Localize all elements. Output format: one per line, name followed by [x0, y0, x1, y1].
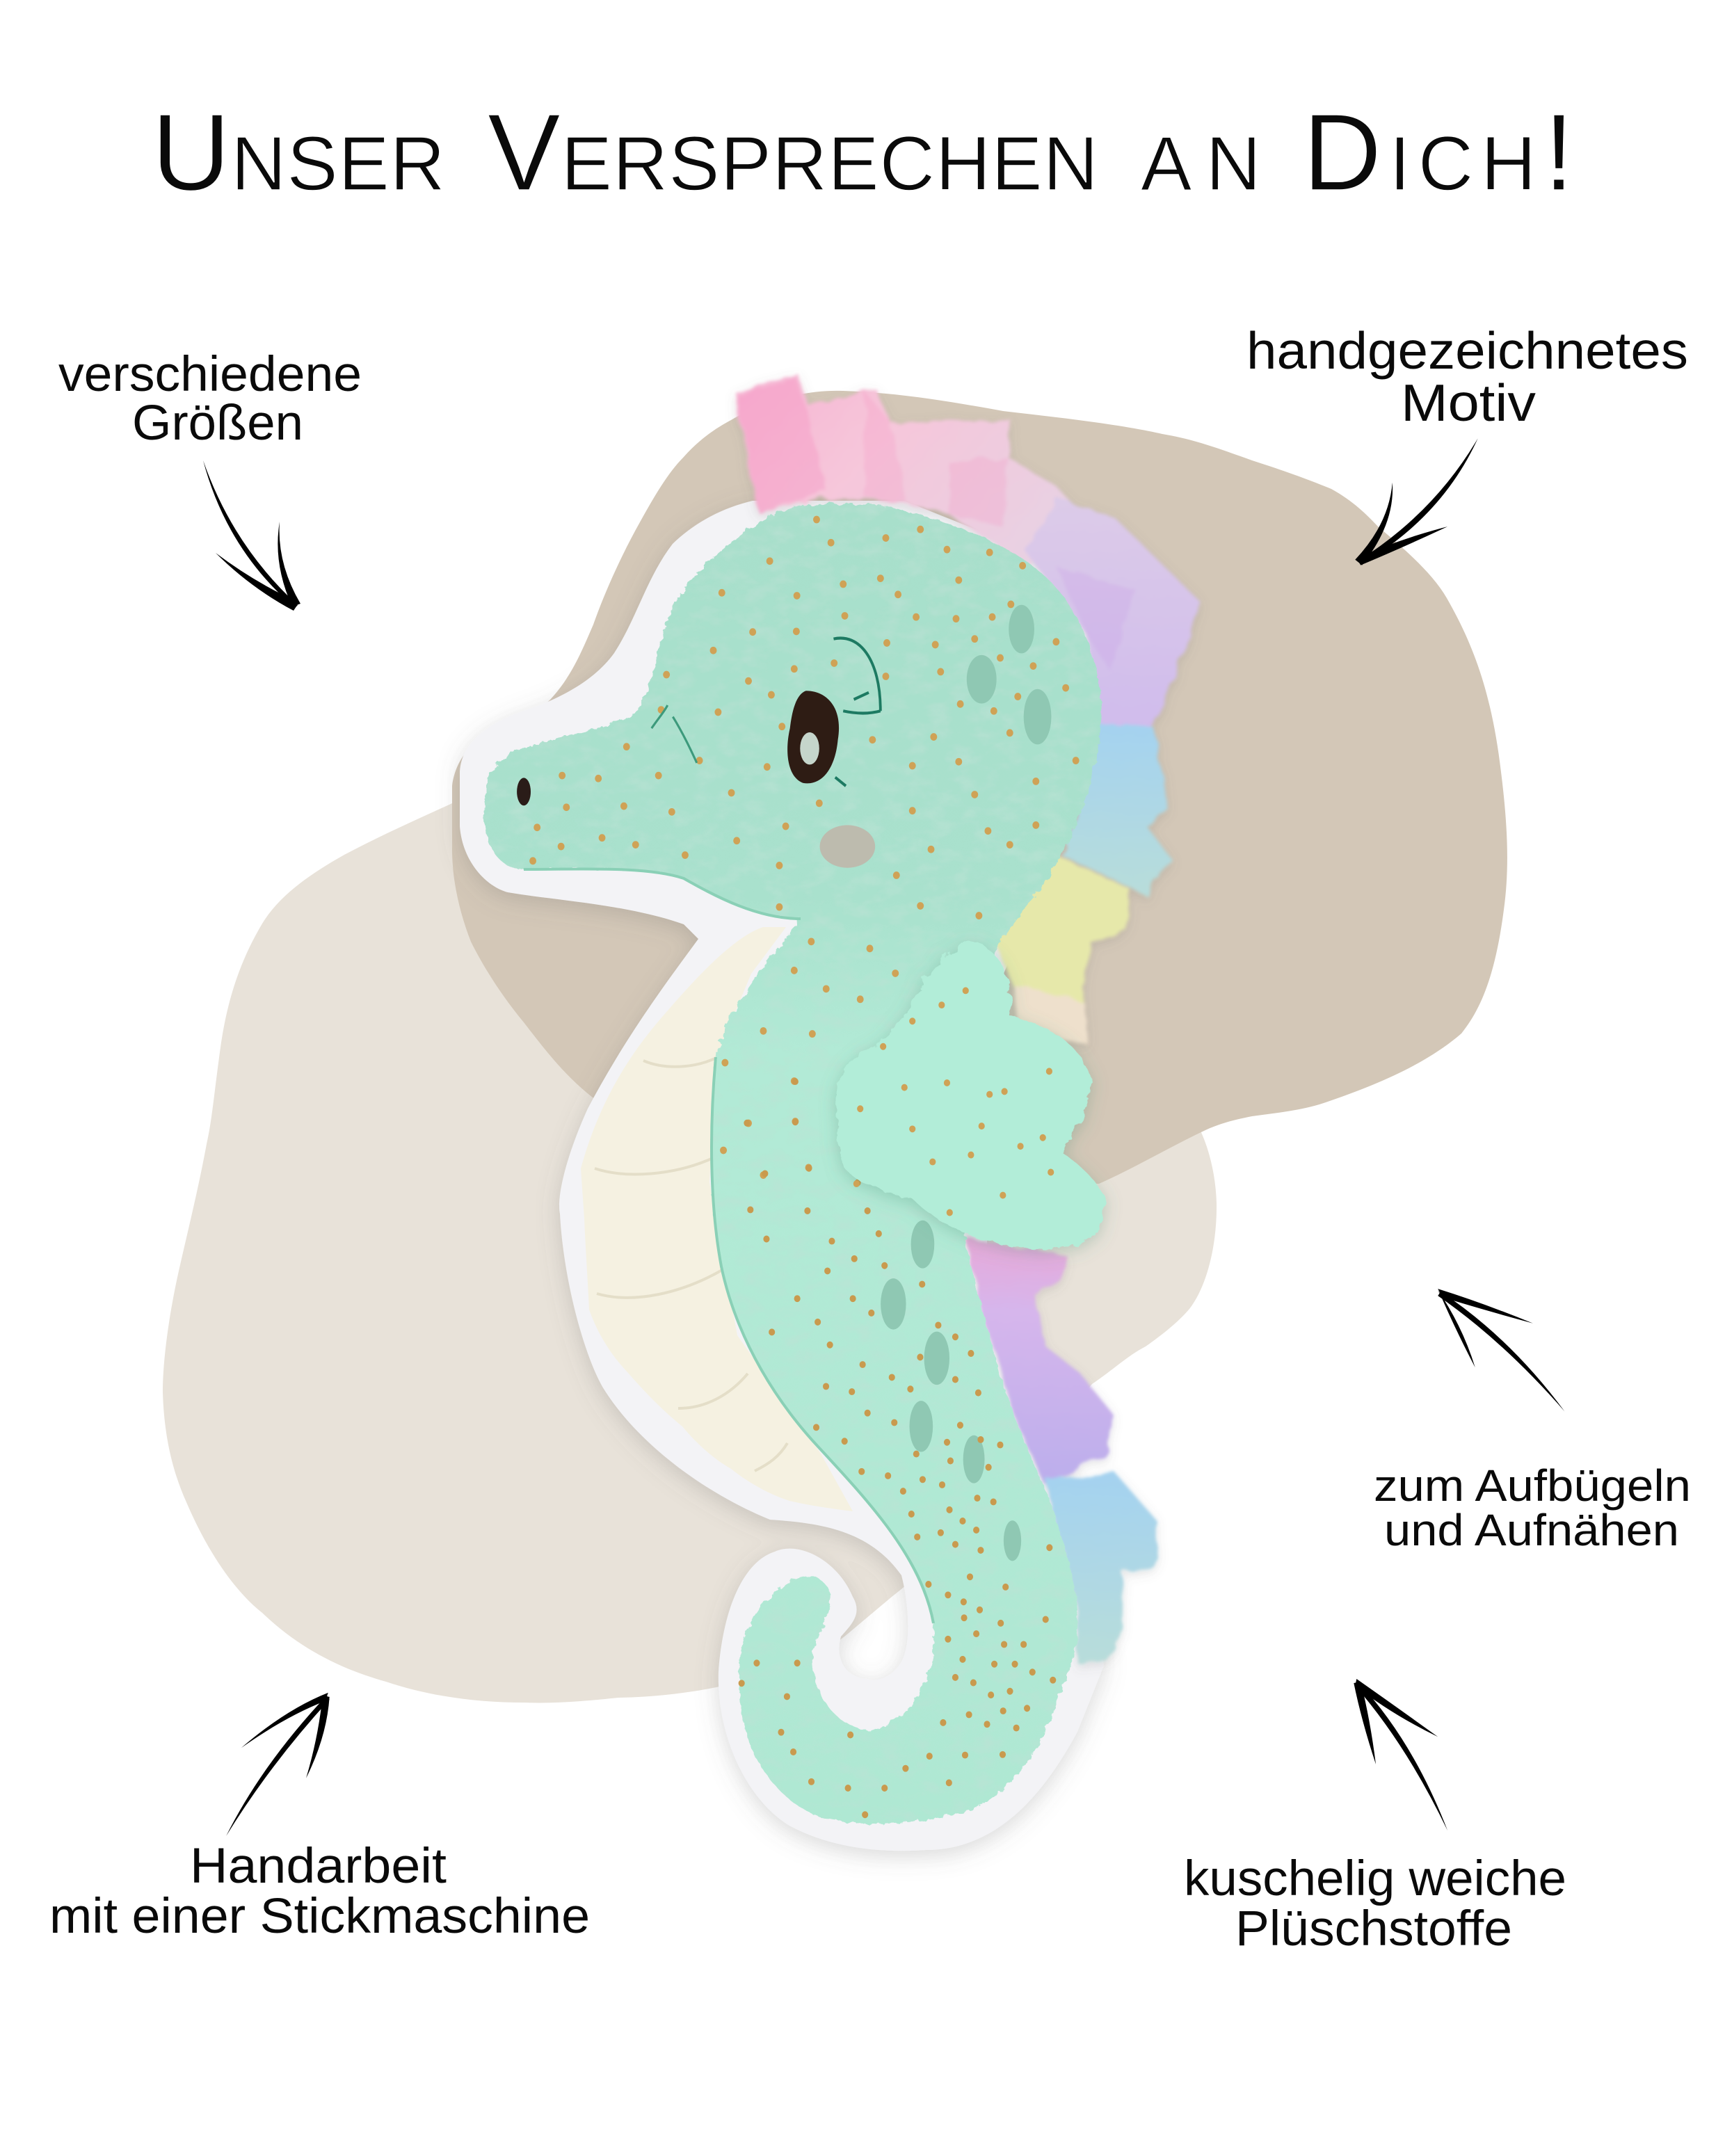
- gills on body: [881, 1221, 1021, 1561]
- background blob: dark beige: [452, 391, 1507, 1184]
- label: verschiedene Größen: verschiedene: [58, 347, 362, 402]
- eye: [787, 691, 839, 783]
- label: Handarbeit mit einer Stickmaschine: [49, 1839, 590, 1944]
- fluffy wing: [837, 942, 1107, 1249]
- background blob: light beige: [163, 803, 1217, 1703]
- tulle frill: head and back: [734, 376, 1200, 1045]
- tulle frill: lower back: [965, 1237, 1158, 1663]
- title: Versprechen: [488, 92, 1098, 214]
- stitch lines: [524, 869, 933, 1623]
- label: verschiedene Größen: Größen: [132, 396, 303, 451]
- arrow: right: [1438, 1289, 1565, 1412]
- title: Dich!: [1303, 92, 1574, 214]
- title: [152, 92, 1574, 214]
- label: handgezeichnetes Motiv: Motiv: [1401, 373, 1537, 432]
- cheek: [820, 825, 875, 868]
- title: an: [1141, 92, 1261, 214]
- seahorse plush patch: [460, 376, 1200, 1851]
- gold dots: head and chest: [533, 520, 1076, 1175]
- arrow: top left: [203, 460, 300, 611]
- wing gold dots: [856, 990, 1051, 1213]
- label: verschiedene Größen: [58, 347, 362, 451]
- eyelid and lashes: [833, 638, 881, 786]
- face details: [517, 605, 1051, 868]
- snout marks: [652, 705, 697, 763]
- cream belly: [581, 927, 853, 1511]
- nostril: [517, 778, 531, 805]
- eye highlight: [800, 732, 819, 764]
- label: zum Aufbügeln und Aufnähen: zum Aufbügeln: [1374, 1461, 1691, 1511]
- belly segment seams: [595, 1054, 787, 1471]
- label: zum Aufbügeln und Aufnähen: [1374, 1461, 1691, 1555]
- label: kuschelig weiche Plüschstoffe: Plüschstoffe: [1235, 1901, 1512, 1956]
- tulle highlights: [737, 380, 827, 512]
- mint plush body: [484, 504, 1101, 1824]
- gold dots: lower body and tail: [741, 1081, 1053, 1815]
- label: handgezeichnetes Motiv: [1246, 321, 1688, 432]
- label: Handarbeit mit einer Stickmaschine: mit einer Stickmaschine: [49, 1889, 590, 1944]
- white felt backing: [460, 501, 1106, 1851]
- arrow: bottom right: [1354, 1679, 1447, 1831]
- label: handgezeichnetes Motiv: handgezeichnetes: [1246, 321, 1688, 380]
- label: zum Aufbügeln und Aufnähen: und Aufnähen: [1384, 1505, 1679, 1555]
- title: Unser: [152, 92, 445, 214]
- label: kuschelig weiche Plüschstoffe: kuschelig weiche: [1184, 1851, 1566, 1906]
- label: kuschelig weiche Plüschstoffe: [1184, 1851, 1566, 1956]
- arrow: bottom left: [226, 1693, 330, 1836]
- arrow: top right: [1355, 438, 1478, 565]
- head gills: [967, 605, 1051, 744]
- label: Handarbeit mit einer Stickmaschine: Handarbeit: [190, 1839, 447, 1894]
